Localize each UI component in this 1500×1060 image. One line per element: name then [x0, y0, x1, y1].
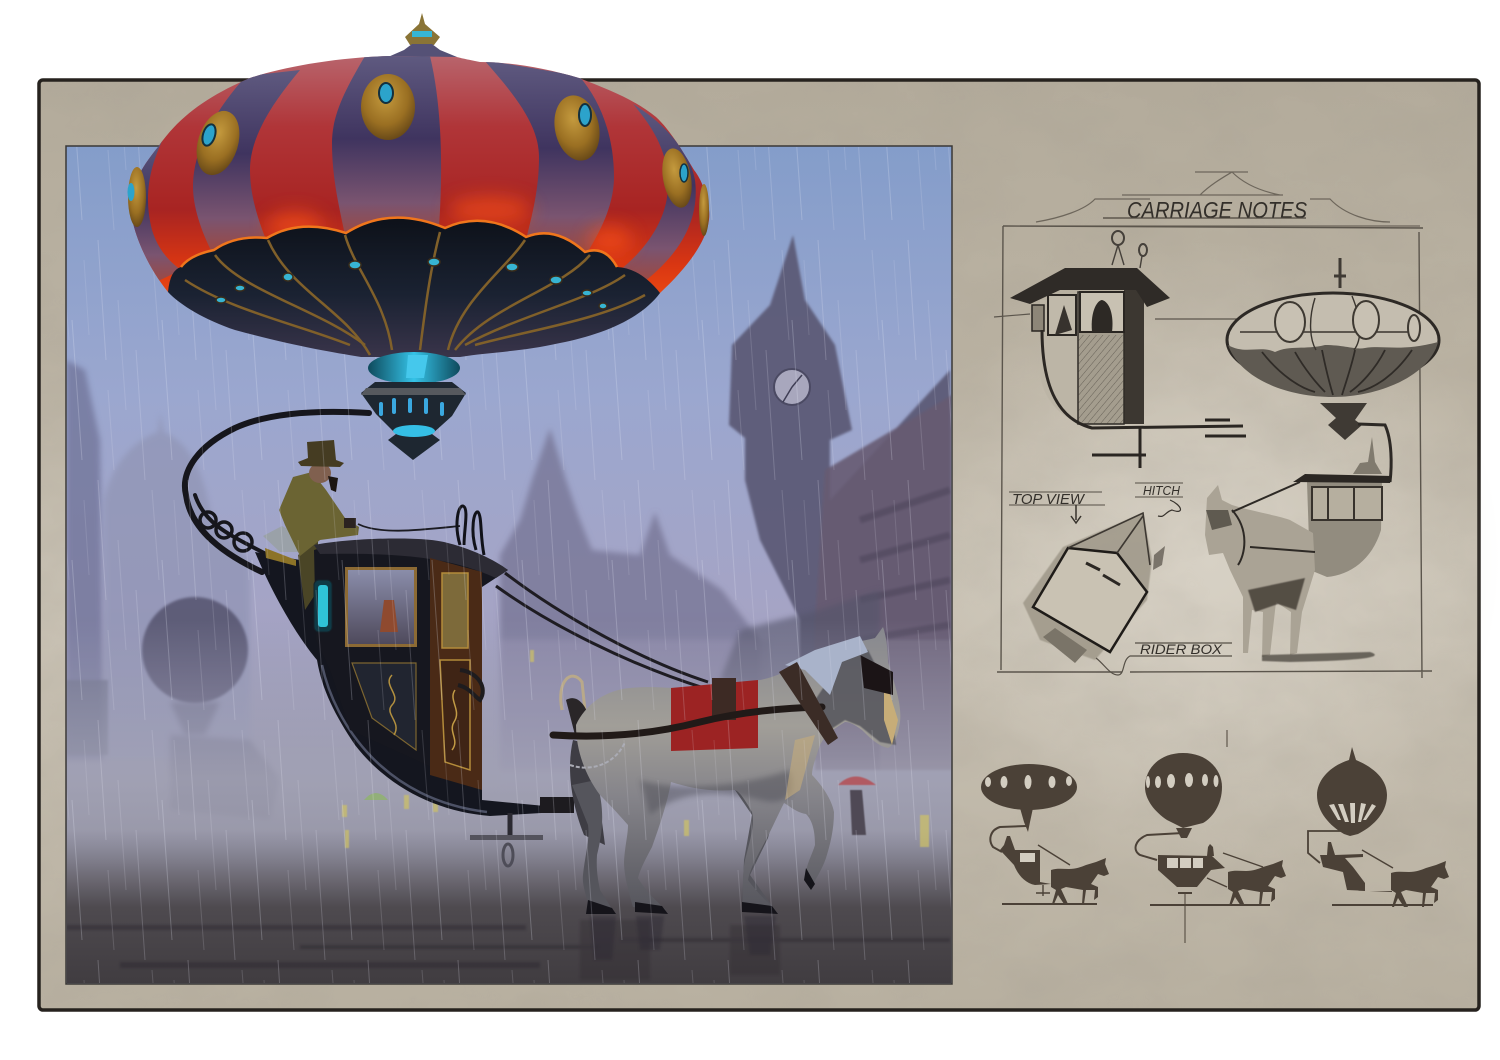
door [430, 558, 483, 790]
label: hitch: HITCH [1143, 483, 1181, 498]
lower lantern bowl [361, 382, 466, 460]
label: rider box: RIDER BOX [1140, 641, 1223, 657]
heading: carriage notes: CARRIAGE NOTES [1127, 197, 1308, 223]
balloon envelope with stripes [120, 56, 709, 293]
traces to horse [496, 573, 708, 688]
distant balloon [67, 596, 262, 766]
mane [785, 636, 868, 695]
carriage [185, 412, 708, 866]
sketch: horse with carriage [1205, 437, 1392, 662]
panel: painting of the rainy street [66, 146, 952, 985]
far legs [572, 780, 775, 912]
sketch: carriage cabin [994, 231, 1246, 468]
lower panel with ornament [352, 663, 416, 750]
hoof reflection [590, 916, 776, 960]
roof scrolls [457, 506, 484, 555]
fence at right [720, 600, 878, 682]
chain [570, 742, 625, 768]
shoulder highlight [785, 735, 815, 800]
street reflections [67, 921, 950, 968]
blinder [860, 655, 893, 695]
glowing lamp ring [368, 352, 460, 384]
harness belt [553, 707, 822, 736]
distant cathedral [498, 430, 758, 732]
tail [561, 676, 605, 845]
heading: carriage notes [1020, 172, 1420, 226]
hull highlight [322, 665, 487, 812]
carriage cabin [314, 541, 508, 790]
driver seat [263, 526, 304, 566]
lantern [314, 580, 332, 632]
label: hitch [1135, 483, 1183, 516]
collar [779, 662, 838, 745]
carriage hull [255, 552, 558, 816]
hooves [586, 868, 815, 914]
green umbrella [364, 793, 388, 800]
saddle blanket [671, 680, 758, 751]
main balloon [120, 13, 709, 460]
sketch panel frame [997, 226, 1432, 678]
driver [279, 440, 359, 610]
gold medallions [128, 74, 709, 236]
clock tower and right buildings [729, 235, 952, 770]
dark underside with scalloped rim [168, 218, 660, 357]
silhouette: second concept [1136, 730, 1286, 943]
support arm [185, 412, 369, 572]
distant dome and left buildings [66, 360, 250, 760]
gold ribs [185, 232, 645, 355]
blue gems on underside [216, 258, 607, 309]
pedestrian with red umbrella [838, 776, 876, 835]
belly shading [640, 770, 793, 815]
finial [388, 13, 457, 57]
rain overlay [66, 146, 952, 984]
silhouette: third concept [1308, 747, 1449, 907]
street haze [67, 640, 951, 850]
lower steering fin [470, 797, 574, 866]
tower clock face [774, 369, 810, 405]
label: rider box [1096, 641, 1232, 675]
title flourish [1020, 172, 1420, 226]
label: top view [1009, 491, 1105, 523]
orange glow [267, 196, 632, 254]
reins from driver [358, 524, 460, 531]
head and neck shading [815, 650, 896, 745]
wet street [66, 830, 952, 985]
body [576, 627, 900, 910]
saddle strap [712, 678, 736, 720]
muzzle highlight [884, 675, 898, 745]
roof [314, 538, 508, 578]
sketch: balloon [1227, 258, 1439, 482]
distant yellow lights [342, 650, 929, 848]
label: top view: TOP VIEW [1012, 491, 1086, 508]
sketch: top view [1023, 513, 1165, 663]
passenger window [345, 567, 417, 647]
silhouette: first concept [981, 764, 1109, 905]
horse [553, 627, 900, 960]
